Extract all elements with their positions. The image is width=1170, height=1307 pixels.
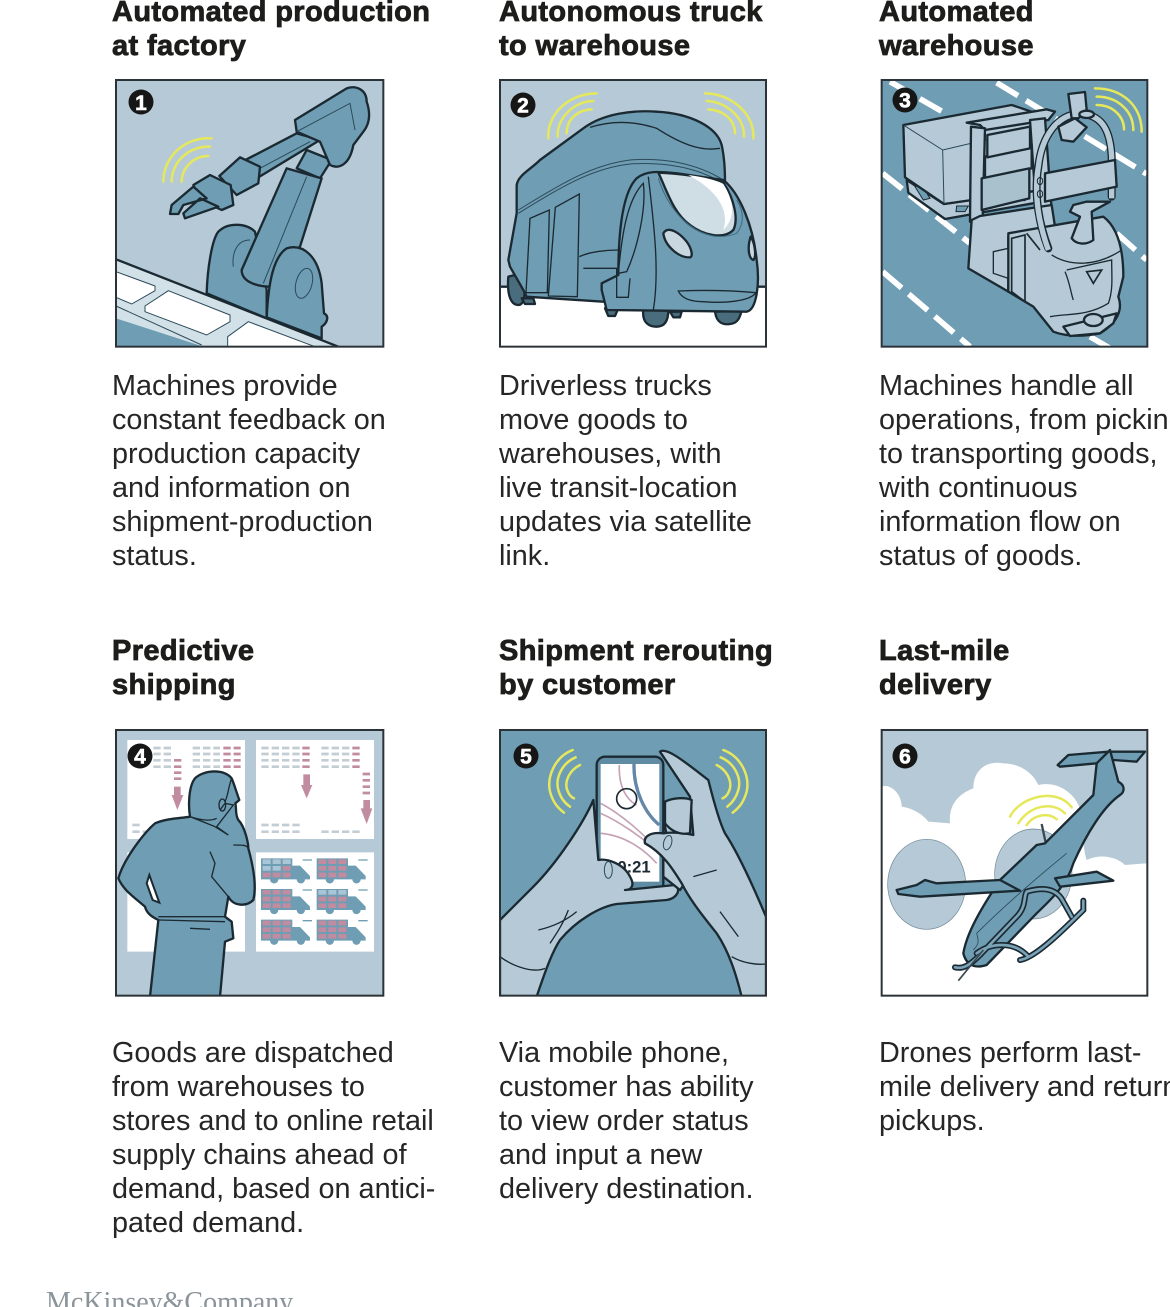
description: shipment-production [112, 506, 373, 538]
description: to transporting goods, [879, 438, 1158, 470]
description: and information on [112, 472, 351, 504]
description: Machines handle all [879, 370, 1134, 402]
heading: last-mile delivery: delivery [879, 669, 992, 701]
description: production capacity [112, 438, 361, 470]
badge: number 3 [892, 88, 918, 112]
panel: automated warehouse [878, 0, 1170, 572]
description: warehouses, with [498, 438, 722, 470]
description: status. [112, 540, 197, 572]
heading: shipment rerouting: by customer [499, 669, 676, 701]
badge: number 2 [510, 92, 536, 118]
illustration: hands holding phone [500, 730, 766, 997]
heading: predictive shipping: shipping [112, 669, 236, 701]
heading: last-mile delivery: Last-mile [879, 635, 1010, 667]
description: Via mobile phone, [499, 1037, 729, 1069]
badge: number 5 [514, 744, 538, 768]
heading: automated warehouse: warehouse [878, 30, 1034, 62]
description: mile delivery and return [879, 1071, 1170, 1103]
heading: automated production: at factory [112, 30, 246, 62]
description: Driverless trucks [499, 370, 712, 402]
panel: automated production at factory [112, 0, 430, 572]
description: pickups. [879, 1105, 985, 1137]
description: demand, based on antici- [112, 1173, 435, 1205]
illustration: delivery drone [882, 730, 1147, 997]
description: live transit-location [499, 472, 737, 504]
description: Machines provide [112, 370, 338, 402]
badge: number 1 [128, 90, 154, 115]
badge: number 2: 2 [517, 94, 529, 118]
description: and input a new [499, 1139, 703, 1171]
description: constant feedback on [112, 404, 386, 436]
illustration: planner reading demand board [116, 730, 383, 997]
description: link. [499, 540, 550, 572]
illustration: automated forklift [882, 80, 1147, 348]
description: supply chains ahead of [112, 1139, 408, 1171]
illustration: hands holding phone: 0:21 [617, 858, 651, 877]
description: customer has ability [499, 1071, 754, 1103]
description: pated demand. [112, 1207, 304, 1239]
description: delivery destination. [499, 1173, 754, 1205]
badge: number 5: 5 [520, 746, 532, 768]
description: information flow on [879, 506, 1121, 538]
heading: shipment rerouting: Shipment rerouting [499, 635, 773, 667]
badge: number 4 [128, 744, 152, 768]
heading: predictive shipping: Predictive [112, 635, 254, 667]
badge: number 4: 4 [134, 746, 146, 768]
description: from warehouses to [112, 1071, 365, 1103]
description: updates via satellite [499, 506, 752, 538]
badge: number 1: 1 [135, 92, 147, 115]
description: Drones perform last- [879, 1037, 1141, 1069]
description: stores and to online retail [112, 1105, 434, 1137]
illustration: driverless truck [500, 80, 766, 347]
panel: shipment rerouting by customer [499, 635, 773, 1205]
panel: autonomous truck to warehouse [498, 0, 766, 572]
panel: last-mile delivery [879, 635, 1170, 1137]
illustration: factory robot arm [116, 80, 383, 347]
badge: number 3: 3 [899, 90, 911, 112]
description: to view order status [499, 1105, 749, 1137]
description: with continuous [878, 472, 1078, 504]
badge: number 6: 6 [899, 746, 911, 768]
description: move goods to [499, 404, 688, 436]
heading: autonomous truck: to warehouse [499, 30, 690, 62]
badge: number 6 [892, 744, 918, 768]
description: status of goods. [879, 540, 1082, 572]
panel: predictive shipping [112, 635, 435, 1239]
description: Goods are dispatched [112, 1037, 394, 1069]
